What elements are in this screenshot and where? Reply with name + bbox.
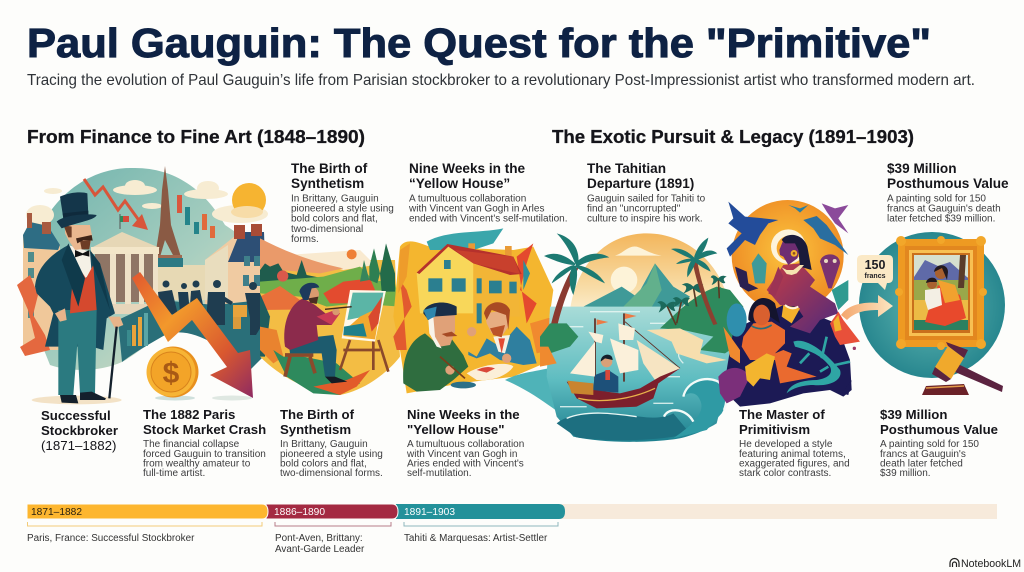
sunset dome — [570, 233, 730, 310]
subtitle: Tracing the evolution of Paul Gauguin’s life from Parisian stockbroker to a revolutionary Post-Impressionist artist who transformed modern art. — [27, 72, 975, 89]
hands — [55, 308, 67, 322]
text block: $39 Million (bottom) — [880, 407, 998, 479]
text block: Nine Weeks (top) — [408, 161, 567, 224]
text block: Nine Weeks (bottom): Nine Weeks in the — [407, 407, 520, 422]
text block: Master of Primitivism: Primitivism — [739, 422, 810, 437]
kneeling woman — [742, 298, 817, 387]
cane — [109, 327, 117, 398]
text block: $39 Million (bottom): death later fetched — [880, 458, 963, 470]
text block: Successful Stockbroker: Stockbroker — [41, 423, 118, 438]
timeline: Pont-Aven, Brittany: — [275, 533, 363, 544]
NotebookLM logo: NotebookLM — [961, 558, 1021, 570]
right palm — [671, 238, 717, 325]
painting — [914, 255, 968, 330]
timeline: 1871–1882 — [31, 507, 82, 518]
trees — [380, 243, 395, 292]
stock exchange building — [91, 232, 160, 248]
orange foliage at left — [17, 275, 50, 356]
gilded frame — [895, 236, 987, 350]
island — [660, 287, 743, 353]
150 francs bubble — [857, 255, 893, 290]
text block: 1882 crash: forced Gauguin to transition — [143, 449, 266, 460]
text block: $39 Million (top): $39 Million — [887, 161, 956, 176]
sun — [232, 183, 266, 217]
small palms — [657, 275, 727, 325]
illustration: painting sale — [841, 232, 1005, 395]
text block: Birth of Synthetism (bottom): Synthetism — [280, 422, 351, 437]
text block: Birth of Synthetism (top): Synthetism — [291, 176, 364, 191]
text block: Birth of Synthetism (top): pioneered a style using — [291, 204, 394, 214]
text block: Tahitian Departure: find an "uncorrupted" — [587, 204, 681, 214]
left palm — [540, 233, 609, 367]
ship — [567, 313, 680, 408]
teal circle — [859, 232, 1005, 378]
text block: $39 Million (bottom): $39 million. — [880, 468, 931, 479]
left foliage — [720, 287, 733, 347]
Gauguin in blue suit — [467, 302, 537, 365]
breaking waves — [557, 379, 726, 440]
text block: $39 Million (top): Posthumous Value — [887, 176, 1009, 191]
text block: Master of Primitivism: stark color contrasts. — [739, 468, 831, 479]
text block: Nine Weeks (top): ended with Vincent's self-mutilation. — [409, 214, 567, 224]
landscape blob — [260, 250, 400, 395]
crash arrow — [132, 272, 253, 398]
text block: Birth of Synthetism (top): The Birth of — [291, 161, 368, 176]
text block: Birth of Synthetism (bottom): pioneered a style using — [280, 449, 383, 460]
text block: 1882 crash: Stock Market Crash — [143, 422, 266, 437]
text block: Birth of Synthetism (bottom): The Birth of — [280, 407, 355, 422]
text block: $39 Million (bottom): francs at Gauguin's — [880, 449, 966, 460]
text block: $39 Million (bottom): A painting sold for 150 — [880, 439, 979, 450]
head — [65, 225, 92, 250]
timeline: Paris, France: Successful Stockbroker — [27, 533, 195, 544]
orange circle backdrop — [732, 200, 844, 312]
text block: Tahitian Departure — [587, 161, 706, 224]
text block: 1882 crash — [143, 407, 266, 479]
sky dome — [40, 168, 270, 370]
text block: Successful Stockbroker: Successful — [41, 408, 111, 423]
text block: Nine Weeks (top): Nine Weeks in the — [409, 161, 526, 176]
yellow house — [417, 243, 522, 323]
left building — [23, 222, 60, 350]
lapels — [62, 243, 85, 307]
canvas — [342, 290, 386, 342]
text block: Birth of Synthetism (top): two-dimensional — [291, 224, 363, 235]
text block: Tahitian Departure: Departure (1891) — [587, 176, 694, 191]
auction gavel — [922, 342, 1003, 395]
150 francs bubble: francs — [864, 273, 886, 280]
timeline — [27, 504, 997, 555]
text block: Successful Stockbroker — [41, 408, 118, 453]
falling line chart — [84, 179, 143, 226]
text block: Nine Weeks (top): A tumultuous collaboration — [409, 194, 526, 204]
text block: 1882 crash: full-time artist. — [143, 468, 205, 479]
text block: Successful Stockbroker: (1871–1882) — [41, 438, 116, 453]
text block: Birth of Synthetism (bottom): In Brittany, Gauguin — [280, 439, 368, 450]
dark blob base — [723, 303, 852, 407]
150 francs bubble: 150 — [865, 258, 885, 272]
text block: Nine Weeks (bottom): with Vincent van Gogh in — [406, 449, 517, 460]
illustration: Paris stock exchange scene — [17, 166, 280, 404]
timeline: Tahiti & Marquesas: Artist-Settler — [404, 533, 548, 544]
illustration: Tahitian voyage — [540, 233, 743, 442]
text block: Master of Primitivism — [739, 407, 850, 479]
title: Paul Gauguin: The Quest for the "Primitive" — [27, 20, 931, 66]
right leaves — [832, 280, 848, 310]
seated tribal figure — [767, 235, 838, 333]
right buildings — [205, 232, 265, 320]
ground — [118, 300, 280, 370]
text block: Birth of Synthetism (bottom) — [280, 407, 383, 479]
timeline: 1886–1890 — [274, 507, 325, 518]
text block: $39 Million (bottom): Posthumous Value — [880, 422, 998, 437]
small sun — [347, 249, 357, 259]
text block: Nine Weeks (bottom): "Yellow House" — [407, 422, 505, 437]
text block: $39 Million (top): later fetched $39 million. — [887, 214, 995, 224]
text block: Tahitian Departure: culture to inspire his work. — [587, 214, 703, 224]
gold coin — [146, 346, 252, 400]
shoes — [60, 395, 78, 403]
text block: Nine Weeks (top): with Vincent van Gogh in Arles — [408, 204, 544, 214]
text block: 1882 crash: The 1882 Paris — [143, 407, 235, 422]
text block: Nine Weeks (bottom): self-mutilation. — [407, 468, 471, 479]
text block: Master of Primitivism: featuring animal totems, — [739, 449, 846, 460]
illustration: Brittany painter — [260, 238, 400, 395]
text block: Tahitian Departure: Gauguin sailed for Tahiti to — [587, 194, 706, 204]
text block: $39 Million (bottom): $39 Million — [880, 407, 947, 422]
text block: Birth of Synthetism (top) — [291, 161, 394, 245]
trousers — [58, 310, 97, 395]
crowd of traders — [158, 280, 265, 335]
section heading: finance to fine art: From Finance to Fine Art (1848–1890) — [27, 126, 365, 147]
text block: 1882 crash: The financial collapse — [143, 439, 240, 450]
shirt — [68, 245, 92, 278]
painter — [284, 283, 352, 383]
candlesticks — [177, 195, 215, 238]
text block: Birth of Synthetism (bottom): bold colors and flat, — [280, 458, 367, 470]
frock coat — [35, 245, 115, 350]
text block: Master of Primitivism: He developed a style — [739, 439, 833, 450]
text block: $39 Million (top): A painting sold for 150 — [887, 194, 986, 204]
gold coin: $ — [163, 357, 180, 390]
bar chart — [127, 313, 148, 346]
text block: Nine Weeks (bottom): Aries ended with Vincent's — [407, 458, 524, 470]
foreground foliage — [260, 293, 270, 357]
illustration: Yellow House with Gauguin and van Gogh — [393, 228, 580, 427]
mountains — [583, 263, 690, 310]
van Gogh with bandage — [403, 302, 468, 392]
text block: Nine Weeks (top): “Yellow House” — [409, 176, 510, 191]
section heading: exotic pursuit: The Exotic Pursuit & Legacy (1891–1903) — [552, 126, 914, 147]
text block: $39 Million (top): francs at Gauguin's death — [887, 204, 1001, 214]
sea — [547, 307, 733, 442]
flower leaves — [830, 312, 860, 345]
text block: Nine Weeks (bottom) — [406, 407, 524, 479]
text block: 1882 crash: from wealthy amateur to — [143, 458, 251, 470]
totem and bat — [752, 253, 767, 283]
text block: Nine Weeks (bottom): A tumultuous collaboration — [407, 439, 524, 450]
lizard — [787, 337, 850, 393]
text block: Master of Primitivism: exaggerated figures, and — [739, 458, 850, 470]
text block: Master of Primitivism: The Master of — [739, 407, 825, 422]
Eiffel tower — [155, 166, 181, 257]
timeline: 1891–1903 — [404, 507, 455, 518]
mask — [820, 254, 840, 288]
wave edge — [505, 363, 580, 427]
top hat — [60, 192, 88, 218]
text block: $39 Million (top) — [887, 161, 1009, 224]
illustration: primitivism figures — [718, 200, 860, 407]
text block: Birth of Synthetism (bottom): two-dimensional forms. — [280, 468, 383, 479]
text block: Birth of Synthetism (top): bold colors and flat, — [291, 214, 378, 224]
easel — [340, 340, 388, 372]
hull — [567, 368, 680, 408]
growth arrow — [841, 295, 893, 320]
timeline: Avant-Garde Leader — [275, 544, 365, 555]
stockbroker figure — [32, 192, 123, 404]
text block: Birth of Synthetism (top): In Brittany, Gauguin — [291, 194, 379, 204]
birds — [727, 202, 778, 257]
colour bursts — [393, 241, 560, 393]
sailor — [593, 370, 618, 393]
text block: Birth of Synthetism (top): forms. — [291, 234, 319, 245]
palette — [467, 364, 513, 380]
text block: Tahitian Departure: The Tahitian — [587, 161, 666, 176]
red vest — [70, 262, 97, 313]
